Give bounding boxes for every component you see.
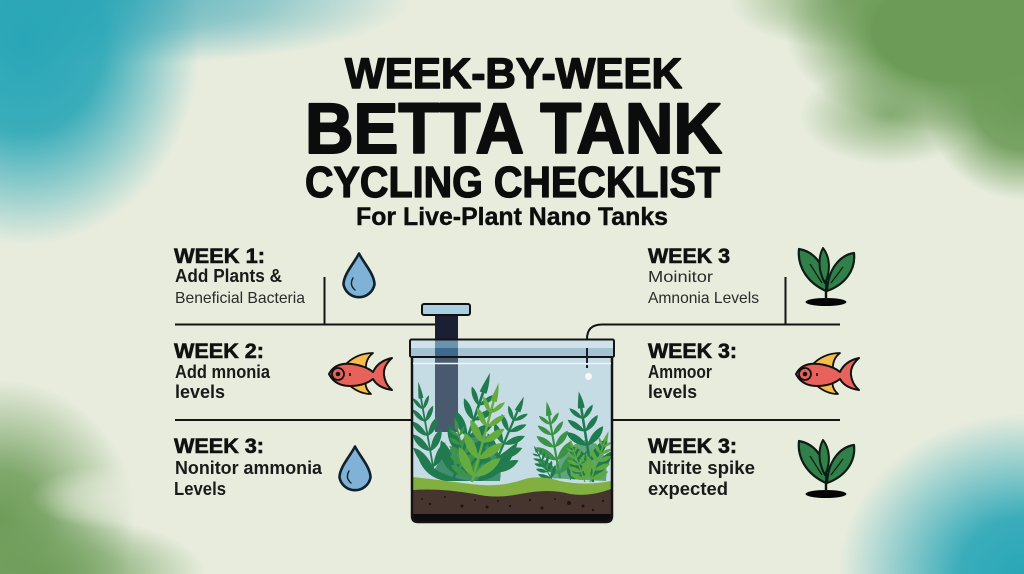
title bbox=[305, 50, 722, 231]
title: CYCLING CHECKLIST bbox=[305, 158, 720, 207]
panel: week 3 bottom right: expected bbox=[648, 479, 728, 499]
panel: week 2: WEEK 2: bbox=[174, 340, 264, 363]
icon: plant bottom right bbox=[799, 440, 854, 498]
panel: week 3 middle right: Ammoor bbox=[648, 362, 712, 382]
panel: week 3 middle right: WEEK 3: bbox=[648, 340, 737, 363]
substrate bbox=[413, 477, 611, 521]
panel: week 3 top right: WEEK 3 bbox=[648, 245, 730, 268]
icon: water drop week 3 bbox=[340, 446, 370, 490]
panel: week 1: Add Plants & bbox=[175, 266, 282, 286]
air tube and bubble bbox=[585, 348, 592, 380]
panel: week 3 left: Nonitor ammonia bbox=[175, 458, 323, 478]
icon: water drop week 1 bbox=[344, 254, 374, 297]
title: For Live-Plant Nano Tanks bbox=[356, 203, 668, 231]
panel: week 3 left: WEEK 3: bbox=[174, 435, 264, 458]
panel: week 3 middle right bbox=[648, 340, 737, 402]
panel: week 2: Add mnonia bbox=[175, 362, 271, 382]
panel: week 1 bbox=[174, 245, 305, 307]
icon: fish right bbox=[796, 353, 859, 394]
panel: week 3 left: Levels bbox=[174, 479, 226, 499]
panel: week 3 top right: Moinitor bbox=[648, 269, 714, 286]
connector lines bbox=[175, 277, 840, 420]
glass outline bbox=[412, 357, 612, 522]
panel: week 2 bbox=[174, 340, 271, 402]
panel: week 3 bottom right: Nitrite spike bbox=[648, 458, 755, 478]
panel: week 2: levels bbox=[175, 382, 225, 402]
panel: week 3 middle right: levels bbox=[648, 382, 697, 402]
panel: week 3 top right bbox=[648, 245, 759, 307]
panel: week 3 left bbox=[174, 435, 323, 499]
water line bbox=[413, 362, 611, 364]
left plants bbox=[402, 365, 542, 488]
filter pipe bbox=[422, 304, 470, 432]
icon: plant top right bbox=[799, 248, 854, 306]
title: WEEK-BY-WEEK bbox=[345, 50, 682, 98]
icon: fish left bbox=[329, 353, 392, 394]
panel: week 1: WEEK 1: bbox=[174, 245, 265, 268]
panel: week 3 top right: Amnonia Levels bbox=[648, 290, 759, 307]
panel: week 1: Beneficial Bacteria bbox=[175, 290, 305, 307]
title: BETTA TANK bbox=[305, 90, 722, 169]
panel: week 3 bottom right bbox=[648, 435, 755, 499]
panel: week 3 bottom right: WEEK 3: bbox=[648, 435, 737, 458]
aquarium tank bbox=[402, 304, 621, 522]
water bbox=[412, 357, 612, 522]
right plants bbox=[525, 388, 621, 487]
tank rim bbox=[410, 340, 614, 357]
